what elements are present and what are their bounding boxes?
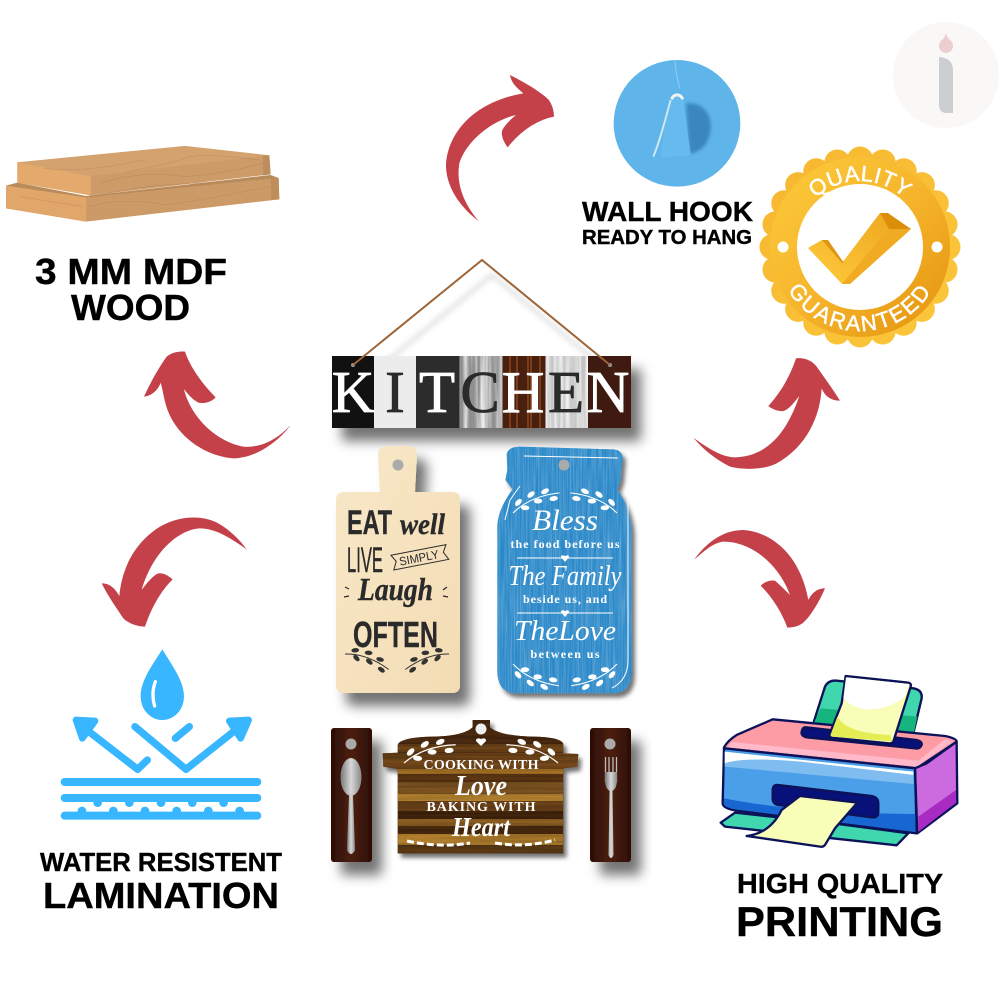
product: cutting board sign: Laugh xyxy=(357,571,433,607)
heading: high quality printing: PRINTING xyxy=(736,898,943,945)
heading: 3 mm mdf wood xyxy=(35,251,227,328)
product: pot sign xyxy=(380,720,580,855)
product: kitchen sign: K xyxy=(332,359,374,425)
arrow: to quality badge xyxy=(693,358,840,469)
arrow: to wood xyxy=(144,352,291,458)
product: mason jar sign: Bless xyxy=(532,504,598,537)
product: spoon plaque xyxy=(331,728,372,862)
printer rear tray xyxy=(813,681,922,733)
heading: water resistent lamination: LAMINATION xyxy=(43,875,279,916)
sign rope xyxy=(353,260,610,365)
product: mason jar sign: between us xyxy=(530,647,600,661)
icon: wall hook xyxy=(614,60,740,187)
arrow: to printing xyxy=(694,530,825,628)
icon: check mark xyxy=(808,213,911,284)
product: mason jar sign xyxy=(497,447,632,695)
product: mason jar sign: TheLove xyxy=(514,616,616,647)
heading: wall hook ready to hang: WALL HOOK xyxy=(582,196,753,227)
heading: 3 mm mdf wood: WOOD xyxy=(71,287,190,328)
watermark logo xyxy=(893,22,999,128)
product: cutting board sign xyxy=(336,446,460,693)
product: kitchen sign xyxy=(332,260,631,428)
product: pot sign: COOKING WITH xyxy=(424,758,539,773)
printer front slot xyxy=(773,785,878,817)
product: mason jar sign: beside us, and xyxy=(523,592,607,606)
product: kitchen sign: E xyxy=(548,359,584,425)
heading: 3 mm mdf wood: 3 MM MDF xyxy=(35,251,227,292)
badge: quality guaranteed: GUARANTEED xyxy=(790,284,928,332)
product: mason jar sign: the food before us xyxy=(510,537,620,551)
product: pot sign: BAKING WITH xyxy=(426,800,536,815)
icon: water resistant xyxy=(65,649,257,816)
product: pot sign: Love xyxy=(454,770,507,802)
product: kitchen sign: H xyxy=(502,359,544,425)
product: cutting board sign: OFTEN xyxy=(353,614,438,655)
product: kitchen sign: C xyxy=(460,359,500,425)
product: kitchen sign: I xyxy=(385,359,405,425)
heading: high quality printing xyxy=(736,868,943,945)
arrow: to lamination xyxy=(102,517,247,627)
product: cutting board sign: EAT xyxy=(347,504,392,542)
badge: quality guaranteed xyxy=(760,146,960,348)
product: cutting board sign: SIMPLY xyxy=(398,547,440,569)
badge: quality guaranteed: QUALITY xyxy=(810,166,914,196)
heading: high quality printing: HIGH QUALITY xyxy=(737,868,943,899)
printer output paper xyxy=(747,796,857,847)
printer top xyxy=(724,719,957,768)
printer front xyxy=(723,748,917,833)
product: cutting board sign: LIVE xyxy=(347,541,383,580)
product: pot sign: Heart xyxy=(451,812,511,842)
heading: wall hook ready to hang: READY TO HANG xyxy=(582,227,752,249)
printer top slot xyxy=(802,727,922,749)
icon: wood planks xyxy=(6,146,279,222)
product: fork plaque xyxy=(590,728,631,862)
printer output tray xyxy=(721,813,908,845)
heading: water resistent lamination xyxy=(40,847,282,916)
product: kitchen sign: T xyxy=(419,359,455,425)
printer input paper xyxy=(829,676,911,743)
heading: water resistent lamination: WATER RESISTENT xyxy=(40,847,282,877)
product: mason jar sign: The Family xyxy=(508,561,622,592)
heading: wall hook ready to hang xyxy=(582,196,753,249)
arrow: to wall hook xyxy=(446,75,554,221)
icon: printer xyxy=(721,676,957,847)
product: kitchen sign: N xyxy=(587,359,629,425)
printer side xyxy=(915,742,957,833)
product: cutting board sign: well xyxy=(400,508,446,541)
